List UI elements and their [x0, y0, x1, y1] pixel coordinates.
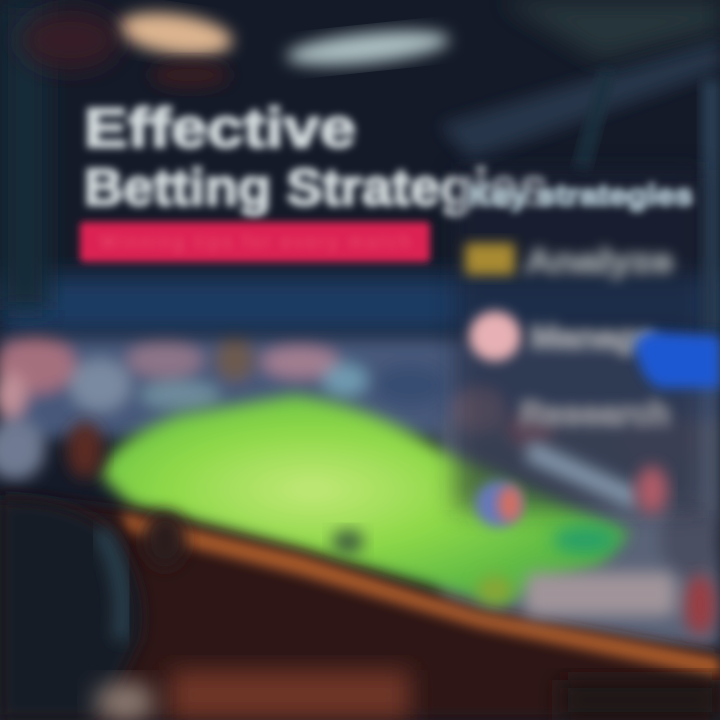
list item 1: gold icon and label: [465, 243, 673, 279]
subtitle banner: [80, 222, 430, 262]
foreground figure: [0, 422, 364, 720]
subtitle banner: Winning tips for every match: [100, 232, 410, 252]
panel heading: Key strategies: [468, 179, 693, 212]
list item 3: label: Research: [520, 395, 670, 433]
red accent: [636, 466, 668, 514]
list item 2: pink icon and label: [469, 311, 655, 361]
blue tag: [635, 332, 720, 388]
title: [84, 96, 549, 217]
ball icon: [475, 481, 522, 527]
list item 1: gold icon and label: Analyze: [525, 243, 673, 279]
list item 2: pink icon and label: Manage: [530, 319, 655, 355]
crowd: [0, 337, 720, 650]
title: Betting Strategies: [84, 159, 549, 217]
rail and stand: [0, 495, 720, 720]
panel: tips list: [455, 170, 720, 514]
light strip: [525, 440, 640, 510]
field: [100, 395, 630, 605]
lower right crowd: [477, 526, 716, 635]
stadium lights: [20, 6, 451, 89]
title: Effective: [84, 96, 356, 159]
